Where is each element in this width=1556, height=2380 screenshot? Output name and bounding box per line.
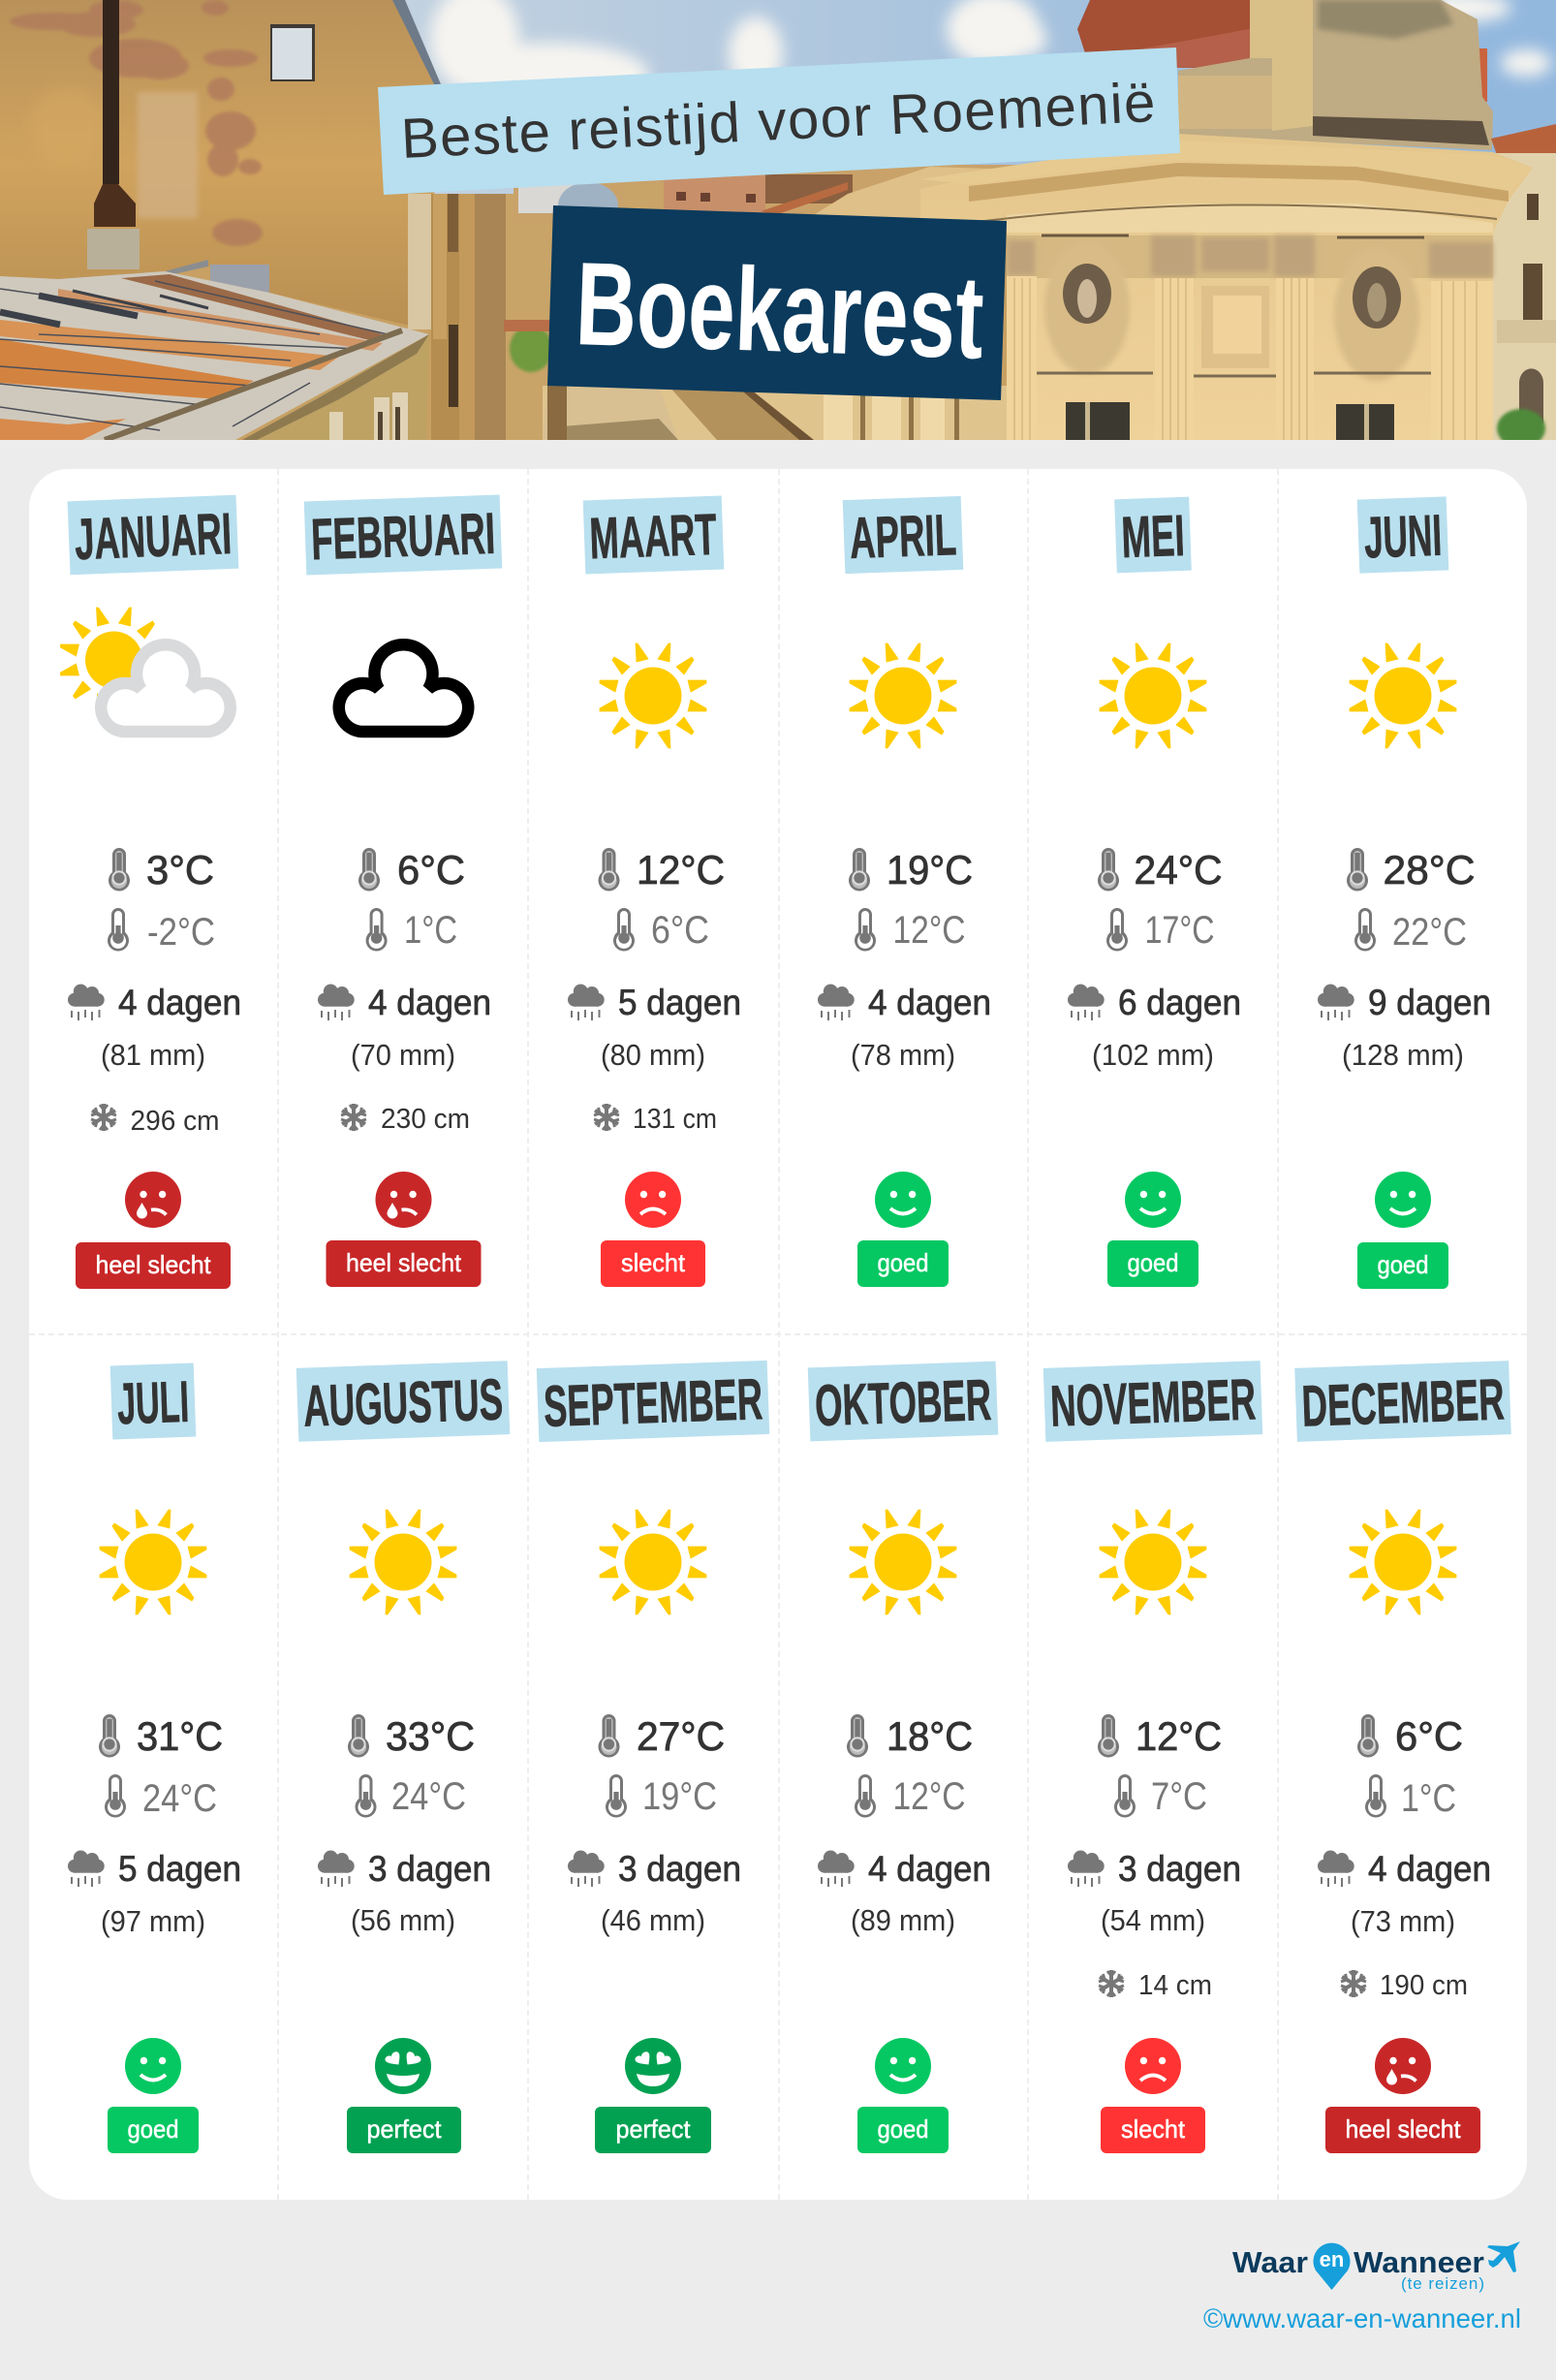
icon: sun [600, 643, 706, 748]
high temperature: 6°C [1395, 1713, 1463, 1759]
right building [1491, 124, 1556, 155]
rain days [568, 983, 741, 1022]
snow: 230 cm [381, 1104, 470, 1135]
high temperature [599, 1713, 725, 1759]
heading [843, 496, 963, 574]
snow [341, 1104, 470, 1135]
high temperature [1098, 1713, 1222, 1759]
month: april [818, 496, 991, 1287]
month: januari [60, 495, 241, 1289]
low temperature: 1°C [404, 909, 457, 952]
low temperature [108, 908, 215, 954]
high temperature [1357, 1713, 1463, 1759]
rainfall: (97 mm) [101, 1904, 205, 1938]
low temperature [1354, 908, 1467, 954]
high temperature [99, 1713, 223, 1759]
rating [857, 1172, 949, 1287]
high temperature: 27°C [637, 1713, 725, 1759]
heading: AUGUSTUS [302, 1366, 504, 1439]
high temperature: 3°C [146, 847, 214, 892]
low temperature: 24°C [142, 1777, 217, 1820]
icon: sun [1100, 643, 1206, 748]
rainfall: (56 mm) [351, 1903, 455, 1937]
rotunda [920, 134, 1533, 440]
icon: sun [600, 1510, 706, 1614]
rain days: 4 dagen [868, 983, 991, 1022]
rating: heel slecht [346, 1248, 462, 1277]
rain days [68, 1849, 241, 1889]
low temperature [105, 1774, 217, 1820]
month: november [1043, 1361, 1262, 2153]
low temperature [855, 908, 965, 952]
snow [1099, 1970, 1212, 2001]
heading: JULI [116, 1369, 190, 1436]
rating: heel slecht [1345, 2114, 1461, 2144]
high temperature: 19°C [887, 847, 973, 892]
rating [857, 2038, 949, 2153]
rain days [818, 983, 991, 1022]
heading [808, 1362, 998, 1441]
low temperature: 1°C [1401, 1777, 1456, 1820]
low temperature: 19°C [642, 1775, 717, 1818]
low temperature [613, 908, 709, 952]
rain days: 4 dagen [868, 1849, 991, 1889]
rain days: 3 dagen [368, 1849, 491, 1889]
high temperature: 12°C [637, 847, 725, 892]
heading [110, 1363, 196, 1439]
tower and dome [1077, 0, 1260, 68]
rating: goed [128, 2114, 178, 2144]
logo: Waar en Wanneer: Wanneer [1354, 2245, 1484, 2279]
heading [1043, 1361, 1262, 1442]
low temperature: 6°C [651, 909, 709, 952]
rain days [1068, 1849, 1241, 1889]
rating: goed [1378, 1250, 1428, 1279]
rating: goed [1128, 1248, 1178, 1277]
snow: 190 cm [1380, 1970, 1468, 2001]
heading [583, 496, 724, 574]
snow: 14 cm [1138, 1970, 1212, 2001]
heading: JANUARI [74, 501, 233, 572]
rain days: 4 dagen [368, 983, 491, 1022]
rain days: 4 dagen [1368, 1849, 1491, 1889]
rainfall: (89 mm) [851, 1903, 955, 1937]
icon: sun [850, 643, 956, 748]
month: oktober [808, 1362, 998, 2153]
rating: slecht [1121, 2114, 1186, 2144]
title banner: city: Boekarest [574, 237, 986, 384]
title banner: subtitle: Beste reistijd voor Roemenië [399, 71, 1157, 171]
rain days [318, 983, 491, 1022]
snow [91, 1104, 219, 1137]
heading: NOVEMBER [1049, 1366, 1257, 1439]
month: september [537, 1361, 769, 2153]
icon: sun [1350, 643, 1456, 748]
rainfall: (54 mm) [1101, 1903, 1205, 1937]
main card [29, 469, 1527, 2200]
heading: FEBRUARI [310, 501, 496, 572]
icon: cloud [339, 644, 468, 732]
rain days [1318, 1849, 1491, 1889]
title banner: subtitle [378, 47, 1180, 195]
rainfall: (70 mm) [351, 1038, 455, 1072]
rating: perfect [616, 2114, 691, 2144]
high temperature: 18°C [887, 1713, 973, 1759]
month: juni [1318, 496, 1491, 1289]
logo: Waar en Wanneer: (te reizen) [1401, 2274, 1484, 2293]
low temperature [1114, 1774, 1207, 1818]
rating: goed [878, 1248, 928, 1277]
logo: Waar en Wanneer: Waar [1232, 2245, 1308, 2279]
rainfall: (128 mm) [1342, 1038, 1464, 1072]
centre backdrop behind title banners [513, 165, 1017, 194]
icon: sun [1350, 1510, 1456, 1614]
rain days [68, 983, 241, 1022]
icon: location pin [1313, 2243, 1351, 2290]
low temperature [1365, 1774, 1456, 1820]
low temperature [606, 1774, 717, 1818]
heading [1114, 497, 1192, 573]
rating [1107, 1172, 1198, 1287]
icon: sun [850, 1510, 956, 1614]
heading: OKTOBER [814, 1367, 992, 1438]
rain days [318, 1849, 491, 1889]
heading: MAART [588, 502, 718, 571]
high temperature: 33°C [386, 1713, 475, 1759]
rating [1357, 1172, 1448, 1289]
heading [1357, 496, 1448, 574]
month: mei [1068, 497, 1241, 1287]
heading [304, 494, 502, 576]
logo: Waar en Wanneer [1232, 2241, 1520, 2293]
rainfall: (102 mm) [1092, 1038, 1214, 1072]
icon: airplane [1487, 2241, 1520, 2272]
low temperature [855, 1774, 965, 1818]
low temperature: -2°C [147, 911, 215, 954]
website credit: ©www.waar-en-wanneer.nl [1203, 2303, 1521, 2333]
rain days: 5 dagen [118, 1849, 241, 1889]
high temperature: 24°C [1134, 847, 1223, 892]
icon: sun behind cloud [60, 608, 231, 732]
rating: perfect [366, 2114, 442, 2144]
high temperature: 31°C [137, 1713, 223, 1759]
rainfall: (80 mm) [601, 1038, 705, 1072]
rain days: 3 dagen [618, 1849, 741, 1889]
low temperature: 12°C [893, 909, 965, 952]
low temperature: 24°C [391, 1775, 466, 1818]
rating [601, 1172, 705, 1287]
high temperature [1098, 847, 1223, 892]
rainfall: (73 mm) [1351, 1904, 1455, 1938]
heading: APRIL [849, 502, 957, 571]
snow [594, 1104, 717, 1135]
high temperature [348, 1713, 475, 1759]
icon: sun [1100, 1510, 1206, 1614]
rain days [1318, 983, 1491, 1022]
rating [326, 1172, 481, 1287]
low temperature: 12°C [893, 1775, 965, 1818]
rainfall: (78 mm) [851, 1038, 955, 1072]
low temperature [366, 908, 457, 952]
rain days [818, 1849, 991, 1889]
high temperature: 28°C [1384, 847, 1475, 892]
rating [76, 1172, 231, 1289]
street below city banner [543, 386, 1008, 440]
rating [347, 2038, 461, 2153]
rainfall: (81 mm) [101, 1038, 205, 1072]
rating: goed [878, 2114, 928, 2144]
roof [0, 271, 429, 440]
low temperature: 17°C [1145, 909, 1215, 952]
rating [108, 2038, 199, 2153]
month: augustus [296, 1361, 510, 2153]
high temperature: 12°C [1136, 1713, 1222, 1759]
rating [595, 2038, 711, 2153]
heading [68, 495, 238, 575]
rainfall: (46 mm) [601, 1903, 705, 1937]
rain days [1068, 983, 1241, 1022]
rating [1325, 2038, 1480, 2153]
snow: 131 cm [633, 1104, 717, 1135]
title banner: city [547, 205, 1007, 400]
rain days: 3 dagen [1118, 1849, 1241, 1889]
snow: 296 cm [130, 1106, 219, 1137]
rating: heel slecht [95, 1250, 211, 1279]
rain days: 9 dagen [1368, 983, 1491, 1022]
month: maart [568, 496, 741, 1287]
icon: sun [100, 1510, 206, 1614]
high temperature: 6°C [397, 847, 465, 892]
low temperature [1106, 908, 1215, 952]
heading: SEPTEMBER [543, 1366, 763, 1439]
high temperature [109, 847, 214, 892]
icon: location pin: en [1320, 2247, 1344, 2271]
high temperature [847, 1713, 973, 1759]
heading [537, 1361, 769, 1442]
heading: MEI [1120, 503, 1186, 570]
high temperature [849, 847, 973, 892]
rain days: 5 dagen [618, 983, 741, 1022]
snow [1341, 1970, 1468, 2001]
low temperature [355, 1774, 466, 1818]
heading: JUNI [1363, 503, 1443, 570]
icon: sun [350, 1510, 456, 1614]
month: december [1294, 1361, 1511, 2153]
month: juli [68, 1363, 241, 2153]
rain days: 4 dagen [118, 983, 241, 1022]
heading [296, 1361, 510, 1442]
month: februari [304, 494, 502, 1287]
low temperature: 22°C [1392, 911, 1467, 954]
high temperature [358, 847, 465, 892]
rating: slecht [621, 1248, 686, 1277]
header photo: Bucharest buildings [0, 0, 1556, 448]
high temperature [599, 847, 725, 892]
low temperature: 7°C [1151, 1775, 1207, 1818]
rain days: 6 dagen [1118, 983, 1241, 1022]
rain days [568, 1849, 741, 1889]
rating [1101, 2038, 1205, 2153]
